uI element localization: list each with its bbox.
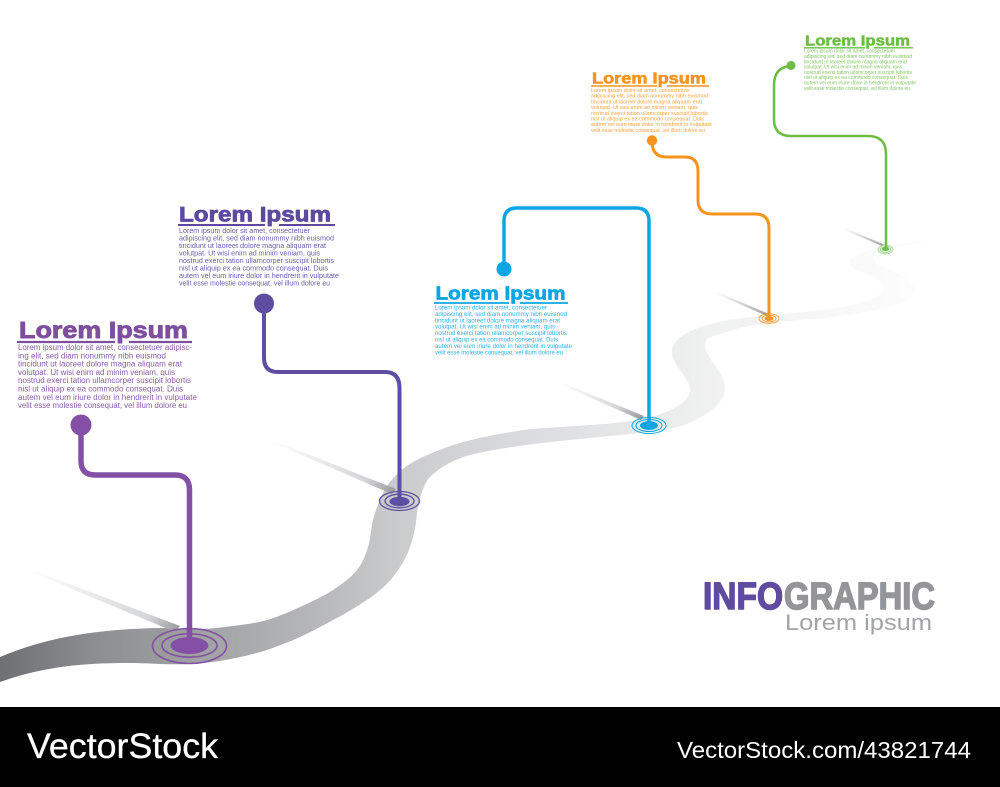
connector line 3 (504, 208, 649, 425)
winding road (0, 240, 940, 682)
footer bar (0, 707, 1000, 787)
body text 5: autem vel eum iriure dolor in hendrerit in vulputate (804, 80, 916, 86)
body text 1: tincidunt ut laoreet dolore magna aliquam erat (18, 360, 183, 369)
connector dot 3 (496, 262, 512, 276)
body text 2: nisl ut aliquip ex ea commodo consequat. Duis (179, 264, 328, 272)
connector line 2 (264, 303, 400, 500)
heading 4: Lorem Ipsum (592, 70, 706, 88)
body text 2: adipiscing elit, sed diam nonummy nibh euismod (179, 234, 334, 242)
body text 4: adipiscing elit, sed diam nonummy nibh euismod (591, 94, 708, 100)
body text 3: adipiscing elit, sed diam nonummy nibh euismod (435, 311, 567, 318)
target rings 4 (759, 314, 779, 323)
connector dot 2 (254, 294, 274, 314)
body text 3: velit esse molestie consequat, vel illum dolore eu (435, 349, 563, 356)
body text 1: nisl ut aliquip ex ea commodo consequat. Duis (18, 384, 183, 394)
body text 1: autem vel eum iriure dolor in hendrerit in vulputate (18, 393, 198, 402)
body text 5: velit esse molestie consequat, vel illum dolore eu (804, 86, 910, 92)
heading 3: Lorem Ipsum (436, 284, 566, 304)
body text 3 (435, 304, 572, 356)
body text 4: autem vel eum iriure dolor in hendrerit in vulputate (591, 122, 712, 128)
body text 3: nisl ut aliquip ex ea commodo consequat. Duis (435, 336, 558, 344)
heading 2: Lorem Ipsum (179, 204, 331, 226)
body text 1: volutpat. Ut wisi enim ad minim veniam, quis (18, 368, 175, 377)
heading underline 4 (591, 85, 709, 87)
body text 4 (591, 88, 712, 134)
heading underline 3 (434, 302, 568, 304)
body text 1: nostrud exerci tation ullamcorper suscipit lobortis (18, 376, 191, 385)
pin shadow 3 (557, 381, 644, 420)
pin shadow 2 (269, 439, 396, 494)
body text 1: velit esse molestie consequat, vel illum dolore eu (18, 401, 187, 410)
target rings 1 (152, 628, 226, 664)
subtitle: Lorem ipsum (785, 610, 932, 635)
pin shadow 5 (842, 227, 885, 247)
heading 5: Lorem Ipsum (805, 34, 910, 50)
body text 2: tincidunt ut laoreet dolore magna aliquam erat (179, 241, 326, 250)
heading underline 5 (804, 47, 913, 49)
connector dot 5 (786, 61, 796, 70)
body text 4: volutpat. Ut wisi enim ad minim veniam, quis (591, 105, 698, 111)
body text 1 (18, 343, 198, 410)
title word INFO: INFO (703, 576, 783, 618)
body text 3: tincidunt ut laoreet dolore magna aliquam erat (435, 317, 560, 324)
body text 5: nisl ut aliquip ex ea commodo consequat. Duis (804, 75, 908, 81)
heading underline 2 (178, 224, 335, 226)
milestone 1: purple (17, 317, 226, 664)
milestone 3: blue (434, 208, 666, 434)
title word GRAPHIC: GRAPHIC (784, 576, 935, 618)
body text 5: tincidunt ut laoreet dolore magna aliquam erat (804, 59, 908, 65)
target rings 3 (632, 418, 666, 434)
body text 3: Lorem ipsum dolor sit amet, consectetuer (435, 304, 547, 312)
milestone 2: indigo (178, 204, 420, 510)
body text 1: Lorem ipsum dolor sit amet, consectetuer adipisc- (18, 343, 192, 352)
body text 2 (179, 226, 339, 288)
body text 3: nostrud exerci tation ullamcorper suscipit lobortis (435, 330, 567, 337)
milestone 4: orange (591, 70, 779, 323)
body text 5: volutpat. Ut wisi enim ad minim veniam, quis (804, 65, 902, 71)
connector line 5 (774, 66, 886, 248)
connector dot 1 (70, 414, 92, 436)
body text 3: volutpat. Ut wisi enim ad minim veniam, quis (435, 324, 555, 331)
pin shadow 4 (714, 291, 769, 316)
body text 5: nostrud exerci tation ullamcorper suscipit lobortis (804, 70, 912, 76)
target rings 2 (380, 492, 420, 510)
title block (703, 576, 935, 635)
body text 4: tincidunt ut laoreet dolore magna aliquam erat (591, 99, 702, 105)
body text 4: nisl ut aliquip ex ea commodo consequat. Duis (591, 116, 704, 122)
body text 2: autem vel eum iriure dolor in hendrerit in vulputate (179, 271, 339, 280)
footer logo: VectorStock (27, 727, 219, 766)
body text 2: nostrud exerci tation ullamcorper suscipit lobortis (179, 256, 334, 265)
body text 5: adipiscing elit, sed diam nonummy nibh euismod (804, 54, 912, 60)
body text 5: Lorem ipsum dolor sit amet, consectetuer (804, 49, 895, 55)
body text 3: autem vel eum iriure dolor in hendrerit in vulputate (435, 343, 572, 350)
connector dot 4 (647, 135, 657, 146)
milestone 5: green (774, 34, 916, 254)
target rings 5 (878, 245, 893, 254)
heading underline 1 (17, 341, 192, 343)
body text 2: Lorem ipsum dolor sit amet, consectetuer (179, 226, 311, 235)
body text 2: volutpat. Ut wisi enim ad minim veniam, quis (179, 248, 320, 258)
body text 2: velit esse molestie consequat, vel illum dolore eu (179, 278, 330, 288)
body text 5 (804, 49, 916, 92)
body text 4: nostrud exerci tation ullamcorper suscipit lobortis (591, 111, 708, 117)
body text 1: ing elit, sed diam nonummy nibh euismod (18, 351, 166, 360)
pin shadow 1 (29, 569, 180, 632)
body text 4: Lorem ipsum dolor sit amet, consectetuer (591, 88, 690, 94)
body text 4: velit esse molestie consequat, vel illum dolore eu (591, 128, 705, 134)
connector line 1 (81, 425, 190, 645)
footer url: VectorStock.com/43821744 (677, 737, 971, 763)
connector line 4 (652, 141, 769, 318)
heading 1: Lorem Ipsum (19, 317, 188, 343)
